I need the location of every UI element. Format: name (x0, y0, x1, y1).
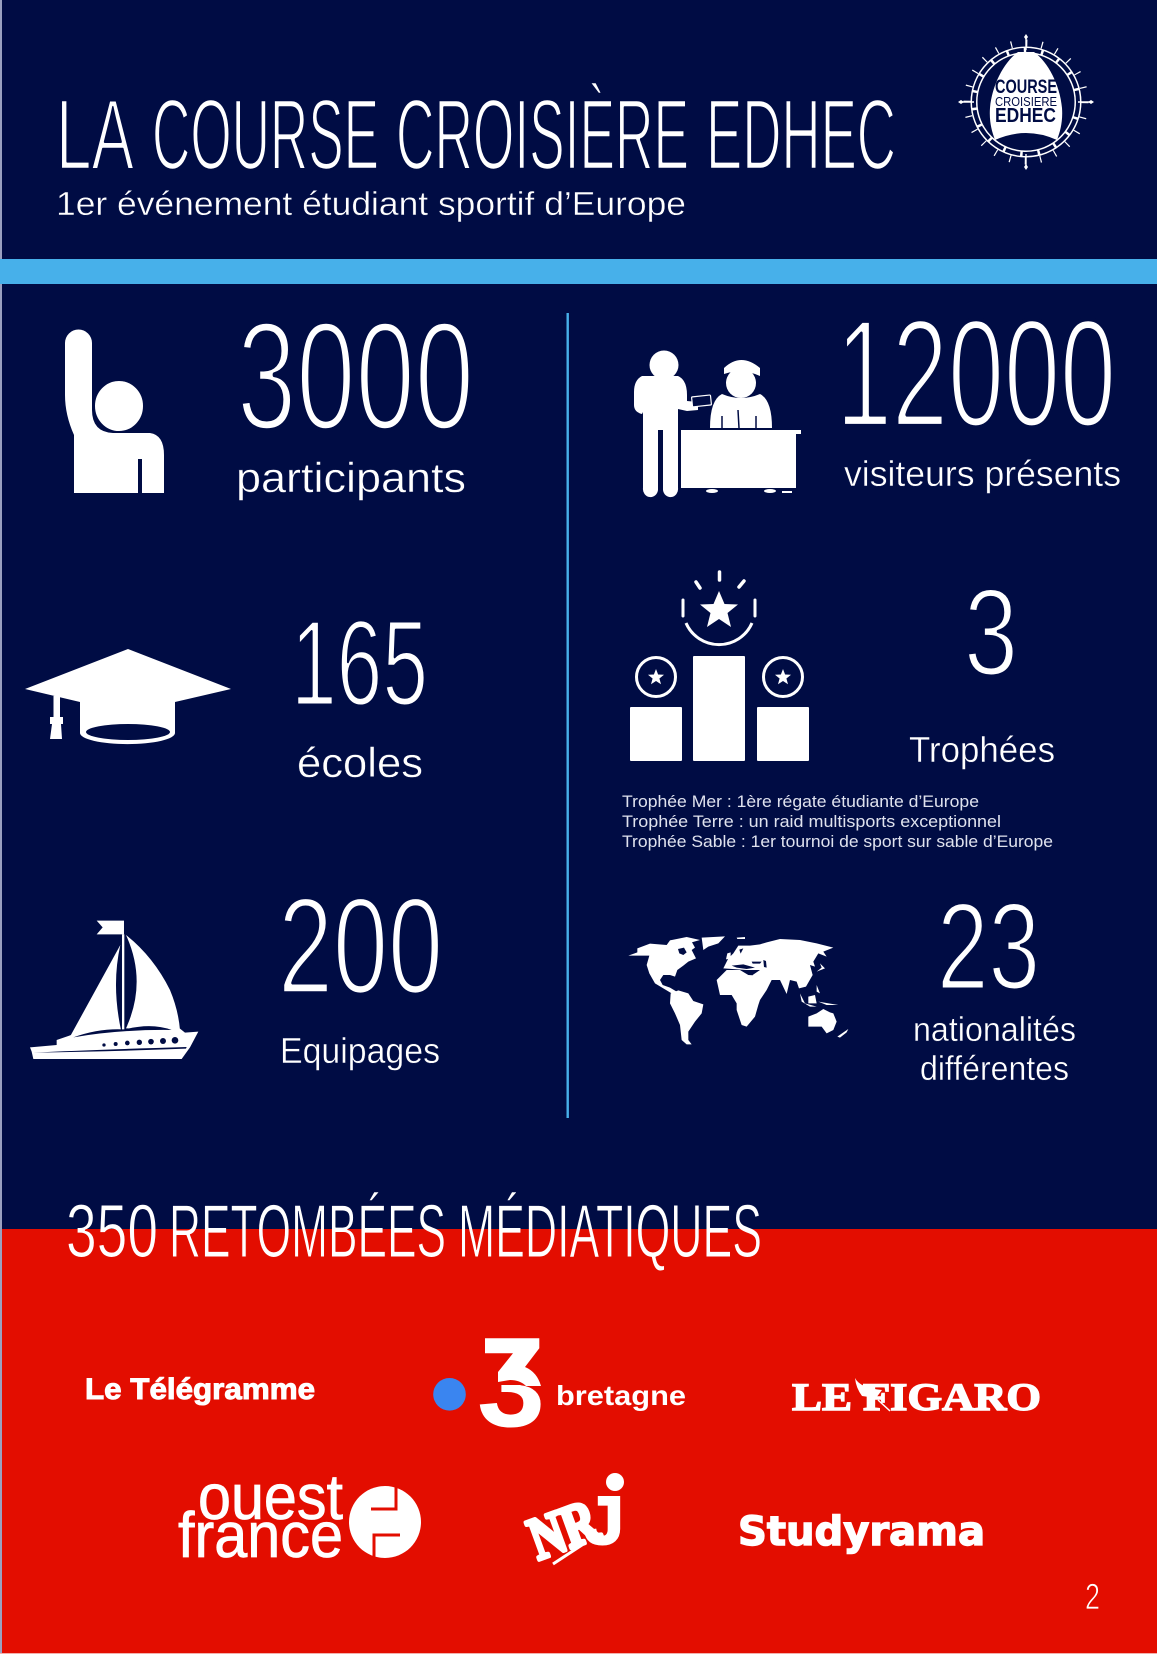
logo: Le Figaro: FIGARO (863, 1376, 1041, 1419)
title: CROISIÈRE (396, 79, 689, 191)
title: EDHEC (706, 79, 896, 191)
stat: 12000 visiteurs présents (634, 288, 1121, 497)
icon: graduation cap (25, 649, 231, 744)
trophy descriptions: Trophée Mer : 1ère régate étudiante d’Europe (622, 792, 979, 811)
logo: Course Croisière EDHEC: COURSE (995, 77, 1057, 98)
label: nationalités (913, 1011, 1076, 1049)
logo: Le Figaro: LE (792, 1376, 852, 1419)
central divider (566, 313, 569, 1118)
label: écoles (297, 739, 423, 786)
heading: media coverage: 350 (66, 1189, 158, 1273)
heading: media coverage: MÉDIATIQUES (458, 1189, 762, 1273)
number: 3000 (237, 290, 474, 462)
logo: Ouest-France: france (178, 1499, 343, 1571)
logo: Ouest-France (178, 1461, 421, 1571)
label: participants (236, 454, 466, 501)
label: Trophées (909, 729, 1055, 770)
logo: NRJ: NR (520, 1487, 607, 1572)
label (913, 1011, 1076, 1088)
trophy descriptions (622, 792, 1053, 851)
stat: 200 Equipages (30, 870, 443, 1071)
logo: Course Croisière EDHEC (958, 34, 1094, 170)
stat: 3000 participants (65, 290, 474, 501)
icon: world map (628, 936, 848, 1044)
number: 200 (278, 870, 443, 1023)
logo: France 3 Bretagne: bretagne (556, 1380, 686, 1411)
heading: media coverage (66, 1189, 762, 1273)
stat: 23 nationalités différentes (628, 879, 1076, 1088)
title: LA (56, 79, 134, 191)
title: COURSE (152, 79, 379, 191)
stat: 165 écoles (25, 595, 428, 786)
icon: podium with stars (630, 572, 809, 761)
logo: France 3 Bretagne: 3 (477, 1321, 545, 1451)
title (56, 79, 896, 191)
panel: red media section (0, 1229, 1157, 1654)
number: 165 (291, 595, 428, 731)
trophy descriptions: Trophée Sable : 1er tournoi de sport sur sable d’Europe (622, 832, 1053, 851)
icon: visitor at desk (634, 350, 801, 497)
icon: sailboat (30, 921, 198, 1059)
label: visiteurs présents (844, 453, 1121, 494)
label: différentes (920, 1050, 1069, 1088)
page number: 2 (1085, 1576, 1100, 1617)
logo: Course Croisière EDHEC: EDHEC (995, 105, 1056, 127)
number: 3 (964, 565, 1018, 702)
logo: Le Figaro (792, 1376, 1041, 1419)
subtitle: 1er événement étudiant sportif d’Europe (56, 185, 686, 222)
logo: NRJ: J (584, 1483, 624, 1559)
heading: media coverage: RETOMBÉES (169, 1189, 446, 1273)
logo: Ouest-France: ouest (198, 1461, 343, 1533)
logo: Le Télégramme: Le Télégramme (85, 1373, 315, 1406)
trophy descriptions: Trophée Terre : un raid multisports exceptionnel (622, 812, 1001, 831)
number: 23 (937, 879, 1040, 1016)
stat: 3 Trophées (622, 565, 1055, 851)
logo: Course Croisière EDHEC: CROISIERE (995, 94, 1057, 109)
logo: Studyrama: Studyrama (738, 1509, 985, 1555)
label: Equipages (280, 1030, 440, 1071)
blue header band (0, 259, 1157, 284)
logo: France 3 Bretagne (433, 1338, 685, 1428)
icon: raised hand (65, 330, 164, 493)
